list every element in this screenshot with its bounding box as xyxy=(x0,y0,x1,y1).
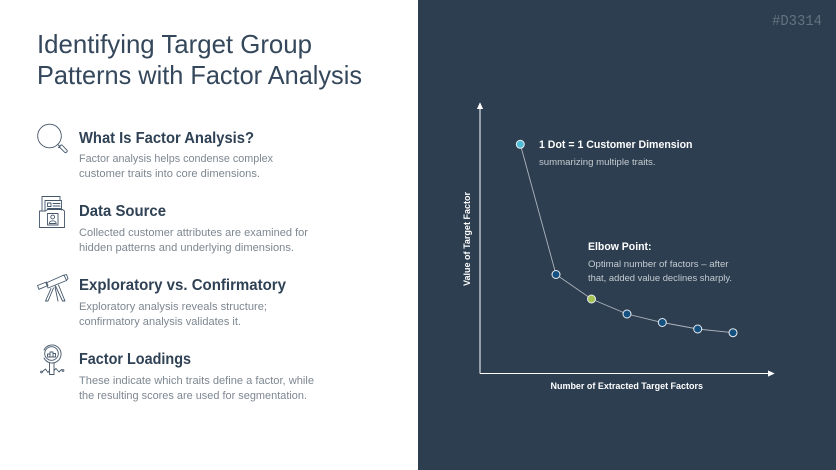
text: data source description: Collected customer attributes are examined for xyxy=(79,227,308,239)
text: factor analysis description xyxy=(79,153,273,180)
icon: magnifier with bars xyxy=(41,345,64,374)
chart: scree plot xyxy=(462,104,774,391)
x axis arrow xyxy=(480,371,774,376)
panel: dark chart background xyxy=(418,0,836,470)
callout: 1 dot: 1 Dot = 1 Customer Dimension xyxy=(539,139,693,151)
title xyxy=(37,29,362,90)
callout: 1 dot xyxy=(539,139,693,168)
text: factor analysis description: customer traits into core dimensions. xyxy=(79,168,260,180)
heading: Exploratory vs. Confirmatory: Exploratory vs. Confirmatory xyxy=(79,277,286,294)
text: exploratory description: confirmatory analysis validates it. xyxy=(79,316,241,328)
y axis arrow xyxy=(478,104,482,374)
callout: elbow point: Elbow Point: xyxy=(588,241,652,253)
text: data source description xyxy=(79,227,308,254)
callout: 1 dot: summarizing multiple traits. xyxy=(539,157,656,168)
text: data source description: hidden patterns and underlying dimensions. xyxy=(79,242,294,254)
heading: Factor Loadings: Factor Loadings xyxy=(79,351,191,368)
x axis label: Number of Extracted Target Factors xyxy=(550,381,703,391)
text: factor loadings description: the resulting scores are used for segmentation. xyxy=(79,390,307,402)
code label: #D3314 xyxy=(772,14,822,30)
heading: Data Source: Data Source xyxy=(79,203,166,220)
icon: document folder xyxy=(40,196,64,228)
data points xyxy=(516,140,737,337)
section: What Is Factor Analysis? xyxy=(38,124,273,180)
callout: elbow point xyxy=(588,241,732,284)
icon: telescope xyxy=(38,274,68,301)
text: factor loadings description xyxy=(79,375,314,402)
callout: elbow point: Optimal number of factors – after xyxy=(588,259,728,270)
callout: elbow point: that, added value declines sharply. xyxy=(588,273,732,284)
section: Exploratory vs. Confirmatory xyxy=(38,274,286,328)
text: factor analysis description: Factor analysis helps condense complex xyxy=(79,153,273,165)
text: factor loadings description: These indicate which traits define a factor, while xyxy=(79,375,314,387)
curve line xyxy=(520,144,733,333)
section: Factor Loadings xyxy=(41,345,314,402)
text: exploratory description: Exploratory analysis reveals structure; xyxy=(79,301,267,313)
section: Data Source xyxy=(40,196,308,254)
heading: What Is Factor Analysis?: What Is Factor Analysis? xyxy=(79,130,254,147)
title: Identifying Target Group xyxy=(37,29,312,59)
text: exploratory description xyxy=(79,301,267,328)
icon: magnifying glass xyxy=(38,124,67,153)
y axis label: Value of Target Factor xyxy=(462,192,472,286)
title: Patterns with Factor Analysis xyxy=(37,60,362,90)
